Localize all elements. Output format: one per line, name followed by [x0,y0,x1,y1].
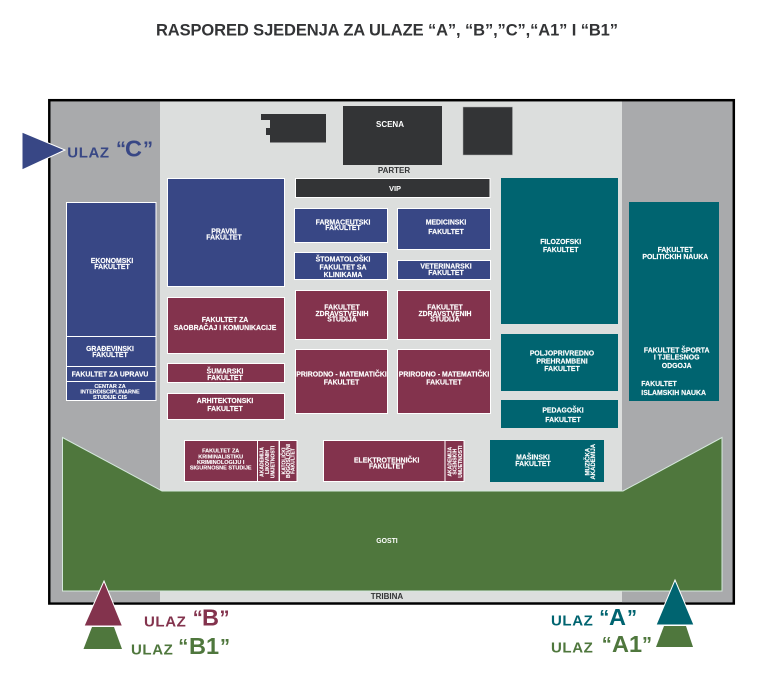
label: ulaz A: “ [599,607,609,629]
panel: Prirodno-matematicki fakultet 1: PRIRODNO - MATEMATIČKI [296,370,387,379]
panel: Pravni fakultet [168,178,284,286]
panel: Prirodno-matematicki fakultet 2: FAKULTET [426,380,463,387]
panel: Fakultet za kriminalistiku [184,440,258,482]
panel: Centar za interdisciplinarne studije: INTERDISCIPLINARNE [80,389,140,395]
panel: Akademija likovnih umjetnosti: AKADEMIJA [260,447,266,477]
arrow: ulaz B1 [84,627,122,649]
label: ulaz C: C [125,136,142,162]
label: ulaz C: ULAZ [67,145,110,162]
panel: Fakultet za kriminalistiku: SIGURNOSNE STUDIJE [190,466,252,472]
panel: Sumarski fakultet: ŠUMARSKI [207,367,243,376]
panel: Filozofski fakultet: FAKULTET [543,247,579,254]
panel: Gosti seating [62,438,722,591]
label: ulaz B: ” [220,608,230,630]
panel: Arhitektonski fakultet [168,394,284,420]
panel: Fakultet zdravstvenih studija 2: FAKULTET [427,305,464,312]
panel: Medicinski fakultet: FAKULTET [428,229,465,236]
panel: Fakulteti politickih nauka, sporta, islamskih nauka: POLITIČKIH NAUKA [642,252,708,261]
panel: Centar za interdisciplinarne studije: CENTAR ZA [94,384,126,390]
panel: Poljoprivredno prehrambeni fakultet: PREHRAMBENI [536,359,588,366]
label: ulaz A: ” [627,607,637,629]
panel: Ekonomski fakultet: FAKULTET [94,264,131,271]
label: ulaz A1: “ [602,634,612,656]
panel: Masinski fakultet i Muzicka akademija: AKADEMIJA [591,443,597,480]
label: ulaz B1: B1 [189,633,219,659]
panel: Veterinarski fakultet: FAKULTET [428,270,465,277]
panel: Akademija likovnih umjetnosti: UMJETNOSTI [270,445,276,478]
panel: Masinski fakultet i Muzicka akademija: MUZIČKA [584,447,591,476]
panel: Akademija likovnih umjetnosti [258,440,279,482]
panel: Fakulteti politickih nauka, sporta, islamskih nauka: I TJELESNOG [654,355,699,362]
panel: Katolicki bogoslovni fakultet [280,440,297,482]
arrow: ulaz A [656,580,694,625]
panel: Fakultet zdravstvenih studija 1: FAKULTET [324,305,361,312]
panel: Medicinski fakultet: MEDICINSKI [426,220,466,227]
panel: Gradevinski fakultet: GRAĐEVINSKI [86,346,134,353]
panel: Arhitektonski fakultet: ARHITEKTONSKI [197,398,253,405]
panel: Akademija scenskih umjetnosti: UMJETNOSTI [458,445,464,478]
panel: Arhitektonski fakultet: FAKULTET [207,406,244,413]
title: RASPORED SJEDENJA ZA ULAZE “A”, “B”,”C”,“A1” I “B1” [156,22,618,40]
panel: Katolicki bogoslovni fakultet: FAKULTET [290,448,296,474]
panel: Fakultet za saobracaj i komunikacije: SAOBRAČAJ I KOMUNIKACIJE [174,323,277,332]
arrow: ulaz B [84,581,122,626]
panel: Katolicki bogoslovni fakultet: KATOLIČKI [280,447,288,474]
panel: Poljoprivredno prehrambeni fakultet: FAKULTET [544,366,581,373]
label: ulaz C: “ [116,139,126,161]
panel: Elektrotehnicki fakultet [324,440,445,482]
panel: Fakultet zdravstvenih studija 2: STUDIJA [430,317,460,324]
VIP [296,178,490,198]
label: ulaz B: “ [193,608,203,630]
panel: Pedagoski fakultet [501,400,618,428]
panel: Pravni fakultet: PRAVNI [211,228,237,236]
panel: Fakulteti politickih nauka, sporta, islamskih nauka: ODGOJA [662,363,692,370]
panel: Sumarski fakultet [168,364,284,382]
panel: Fakultet za kriminalistiku: FAKULTET ZA [202,449,239,455]
panel: Akademija likovnih umjetnosti: LIKOVNIH [265,450,271,474]
parter label: PARTER [378,166,410,175]
panel: Stomatoloski fakultet [294,252,388,280]
panel: Fakultet za saobracaj i komunikacije [168,298,284,354]
panel: Fakultet zdravstvenih studija 1 [296,290,388,340]
panel: Stomatoloski fakultet: FAKULTET SA [320,264,366,271]
panel: Fakulteti politickih nauka, sporta, islamskih nauka: FAKULTET [658,247,694,254]
panel: Pedagoski fakultet: FAKULTET [545,417,582,424]
label: ulaz B1: ULAZ [131,642,173,659]
panel: Ekonomski fakultet [66,202,156,336]
label: ulaz A1: ULAZ [551,639,593,656]
panel: Poljoprivredno prehrambeni fakultet [501,334,618,391]
panel: Pedagoski fakultet: PEDAGOŠKI [542,406,584,415]
panel: Akademija scenskih umjetnosti [445,440,464,482]
label: ulaz B1: ” [220,636,230,658]
panel: Sumarski fakultet: FAKULTET [207,375,244,382]
arrow: ulaz A1 [656,626,693,647]
label: ulaz A1: A1 [612,631,642,657]
panel: Elektrotehnicki fakultet: FAKULTET [369,464,405,471]
panel: Gosti seating: GOSTI [376,538,398,545]
panel: Centar za interdisciplinarne studije: STUDIJE CIS [93,395,127,401]
panel: Filozofski fakultet [501,178,618,324]
panel: Masinski fakultet i Muzicka akademija [490,440,604,482]
label: ulaz A: A [609,604,626,630]
panel: Fakulteti politickih nauka, sporta, islamskih nauka: ISLAMSKIH NAUKA [641,390,706,397]
panel: Prirodno-matematicki fakultet 1 [296,350,388,414]
panel: Medicinski fakultet [398,208,490,250]
panel: Fakultet zdravstvenih studija 2 [398,290,490,340]
panel: Stomatoloski fakultet: ŠTOMATOLOŠKI [316,254,370,263]
panel: Farmaceutski fakultet [294,208,388,242]
panel: Filozofski fakultet: FILOZOFSKI [540,239,581,246]
panel: Centar za interdisciplinarne studije [66,382,156,401]
panel: Akademija scenskih umjetnosti: SCENSKIH [453,448,459,475]
panel: Fakultet zdravstvenih studija 1: STUDIJA [327,317,357,324]
stage [343,106,442,165]
panel: Fakultet zdravstvenih studija 1: ZDRAVSTVENIH [315,311,369,318]
panel: Poljoprivredno prehrambeni fakultet: POLJOPRIVREDNO [530,351,595,358]
label: ulaz B1: “ [178,636,188,658]
stage block right [463,107,512,155]
panel: Masinski fakultet i Muzicka akademija: MAŠINSKI [516,453,550,462]
panel: Gradevinski fakultet [66,336,156,366]
panel: Stomatoloski fakultet: KLINIKAMA [324,272,362,279]
label: ulaz B: ULAZ [144,614,186,631]
panel: Farmaceutski fakultet: FAKULTET [325,225,362,232]
panel: Fakulteti politickih nauka, sporta, islamskih nauka: FAKULTET [641,381,678,388]
panel: Fakultet za upravu [66,366,156,382]
panel: Katolicki bogoslovni fakultet: BOGOSLOVNI [286,443,292,478]
panel: Gradevinski fakultet: FAKULTET [92,352,129,359]
label: ulaz A1: ” [642,634,652,656]
panel: Fakulteti politickih nauka, sporta, islamskih nauka [629,202,719,401]
VIP: VIP [389,184,401,193]
label: ulaz B: B [202,605,219,631]
panel: Farmaceutski fakultet: FARMACEUTSKI [316,219,370,226]
panel: Pravni fakultet: FAKULTET [206,234,243,242]
panel: Veterinarski fakultet [398,260,490,280]
panel: Fakultet za kriminalistiku: KRIMINOLOGIJU I [197,460,245,466]
panel: Prirodno-matematicki fakultet 2 [398,350,490,414]
panel: Fakultet za saobracaj i komunikacije: FAKULTET ZA [202,317,248,324]
label: ulaz A: ULAZ [551,613,593,630]
panel: Veterinarski fakultet: VETERINARSKI [420,264,472,271]
label: ulaz C: ” [143,139,153,161]
panel: Fakultet za upravu: FAKULTET ZA UPRAVU [72,372,148,378]
panel: Fakulteti politickih nauka, sporta, islamskih nauka: FAKULTET ŠPORTA [644,346,710,355]
panel: Fakultet zdravstvenih studija 2: ZDRAVSTVENIH [418,311,472,318]
arrow: ulaz C [22,132,65,170]
panel: Fakultet za kriminalistiku: KRIMINALISTIKU [198,454,243,460]
panel: Masinski fakultet i Muzicka akademija: FAKULTET [515,461,552,468]
hall floor plan background [49,100,734,603]
panel: Akademija scenskih umjetnosti: AKADEMIJA [448,446,454,477]
panel: Prirodno-matematicki fakultet 1: FAKULTET [324,380,360,387]
stage block left [261,114,326,142]
tribina label: TRIBINA [371,592,403,601]
stage: SCENA [376,120,404,129]
panel: Prirodno-matematicki fakultet 2: PRIRODNO - MATEMATIČKI [399,370,489,379]
panel: Elektrotehnicki fakultet: ELEKTROTEHNIČKI [354,456,420,465]
panel: Ekonomski fakultet: EKONOMSKI [91,258,133,265]
